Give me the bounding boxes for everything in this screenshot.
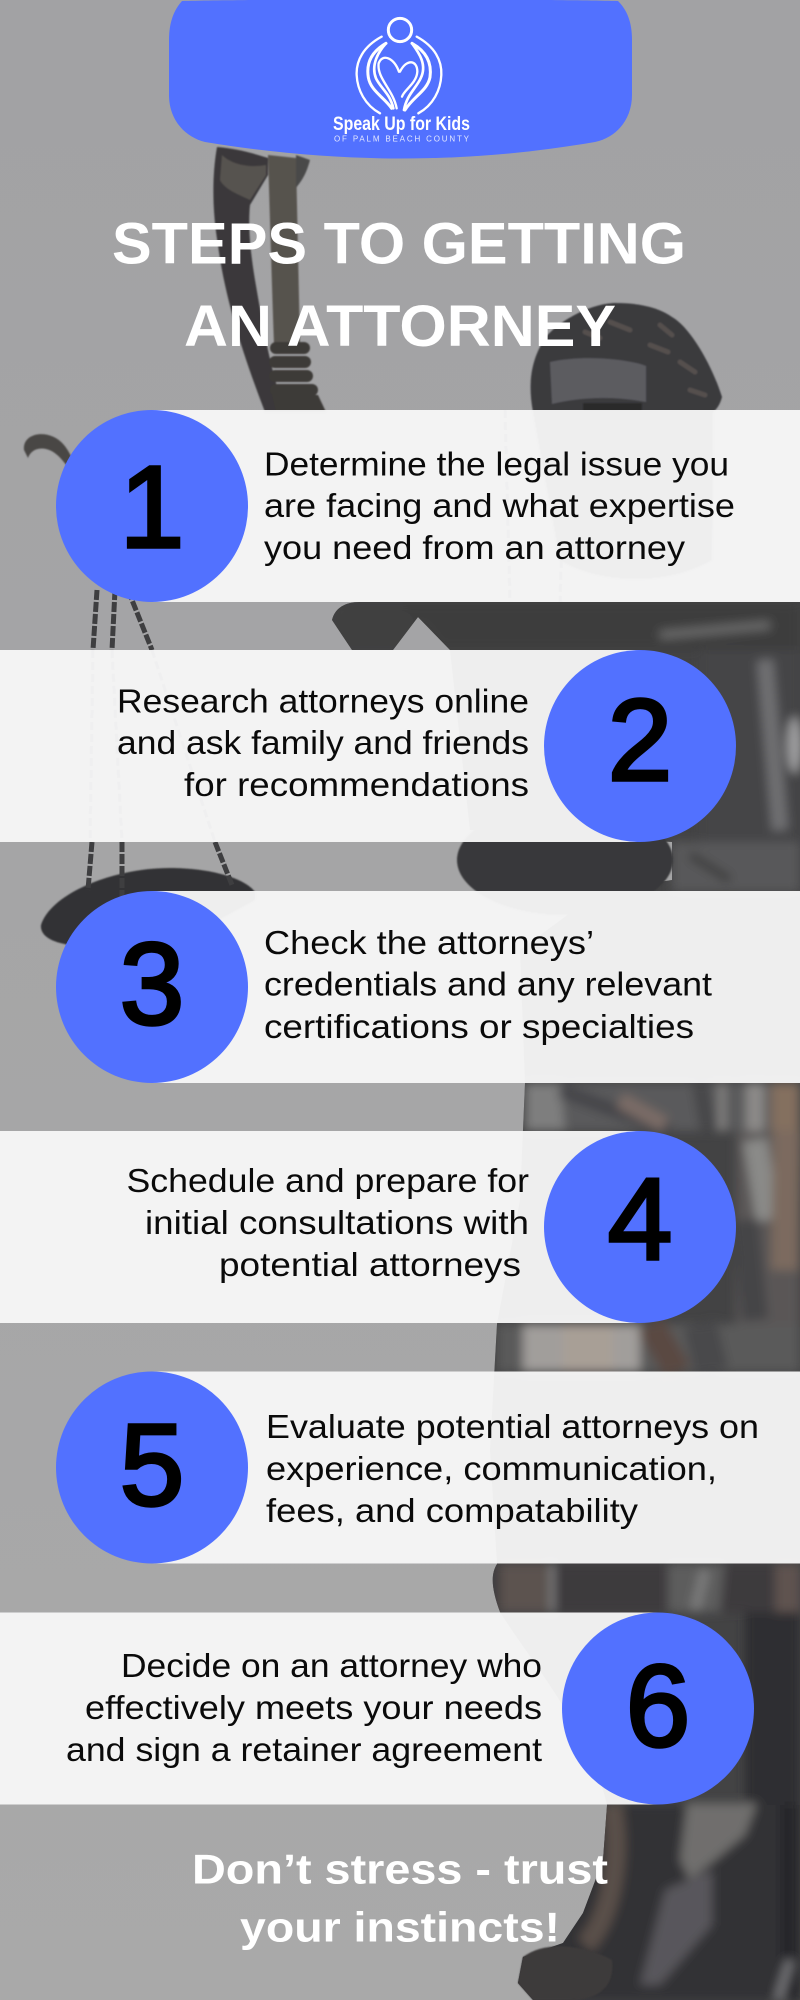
step 2: 2 xyxy=(608,675,672,805)
logo panel xyxy=(169,0,632,158)
logo icon xyxy=(357,18,441,113)
step 3: certifications or specialties xyxy=(264,1008,694,1045)
title xyxy=(112,212,686,359)
step 2 xyxy=(0,650,736,842)
logo subtitle: OF PALM BEACH COUNTY xyxy=(334,134,470,144)
step 2: and ask family and friends xyxy=(117,724,529,761)
step 2: Research attorneys online xyxy=(117,682,529,720)
step 4: initial consultations with xyxy=(145,1204,529,1241)
step 6: effectively meets your needs xyxy=(85,1689,542,1726)
step 1: 1 xyxy=(120,442,184,572)
step 5: experience, communication, xyxy=(266,1450,717,1487)
step 4: Schedule and prepare for xyxy=(126,1162,529,1199)
step 1: are facing and what expertise xyxy=(264,487,735,524)
step 3: Check the attorneys’ xyxy=(264,924,594,961)
step 4: potential attorneys xyxy=(219,1246,521,1283)
step 6: 6 xyxy=(626,1641,690,1771)
step 4: 4 xyxy=(608,1154,672,1284)
title: AN ATTORNEY xyxy=(184,294,616,359)
statue: right scale pan xyxy=(457,805,673,915)
step 4 xyxy=(0,1131,736,1323)
step 3: credentials and any relevant xyxy=(264,966,712,1002)
step 5: fees, and compatability xyxy=(266,1492,639,1529)
step 5: Evaluate potential attorneys on xyxy=(266,1408,759,1445)
closing message: Don’t stress - trust xyxy=(192,1846,608,1892)
statue: chains xyxy=(88,410,578,900)
statue: left scale hook xyxy=(24,434,82,490)
step 1: you need from an attorney xyxy=(264,529,686,566)
statue: raised arm and strap xyxy=(213,147,326,412)
statue: body and drapery xyxy=(300,600,800,2000)
step 1 xyxy=(56,410,800,602)
step 5: 5 xyxy=(120,1400,184,1530)
step 6 xyxy=(0,1612,754,1804)
statue: head xyxy=(531,303,722,579)
step 5 xyxy=(56,1372,800,1564)
step 1: Determine the legal issue you xyxy=(264,446,729,482)
statue: foot xyxy=(518,1946,612,2000)
logo name: Speak Up for Kids xyxy=(333,114,470,135)
step 6: and sign a retainer agreement xyxy=(66,1731,542,1768)
step 3: 3 xyxy=(120,919,184,1049)
statue: left scale pan xyxy=(41,868,255,945)
title: STEPS TO GETTING xyxy=(112,212,686,276)
step 6: Decide on an attorney who xyxy=(121,1647,542,1684)
closing message: your instincts! xyxy=(240,1904,560,1950)
step 2: for recommendations xyxy=(184,766,529,803)
step 3 xyxy=(56,891,800,1083)
closing message xyxy=(192,1846,608,1950)
